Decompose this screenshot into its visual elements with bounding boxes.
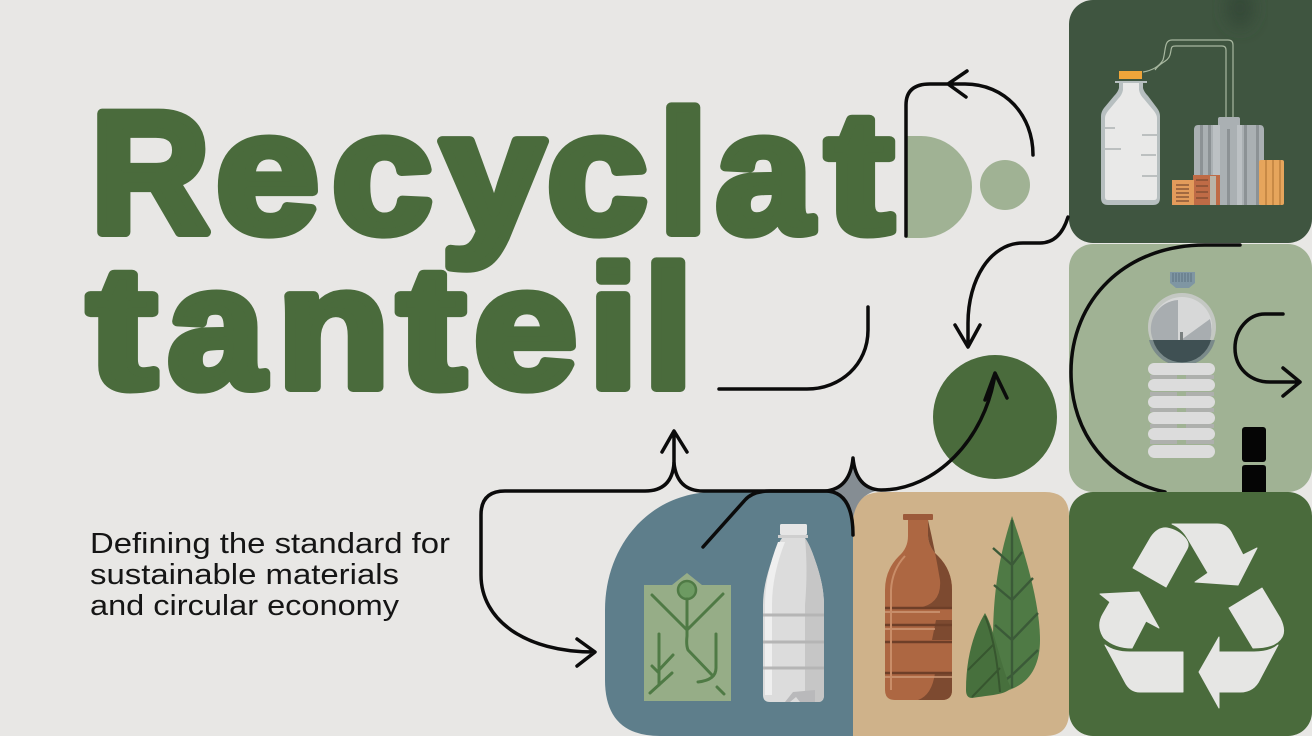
icon: small cartons xyxy=(1172,175,1220,205)
icon: brown bottle xyxy=(885,514,952,700)
title: y xyxy=(441,78,545,269)
pale small circle xyxy=(980,160,1030,210)
title: c xyxy=(332,77,432,269)
icon: ribbed bottle body xyxy=(1148,363,1215,458)
arrow: loop from top arrow to blue panel xyxy=(481,431,687,666)
open curve connector xyxy=(719,307,868,389)
arrow: branch into dark circle xyxy=(674,373,1007,491)
icon: connecting tube xyxy=(1143,40,1233,117)
panel: plant-based and PET blue xyxy=(605,492,853,736)
subtitle text block: and circular economy xyxy=(90,590,400,622)
subtitle text block: sustainable materials xyxy=(90,559,399,591)
icon: grey canister xyxy=(1194,117,1264,205)
subtitle text block xyxy=(90,528,450,622)
arrow: large arc xyxy=(1071,245,1240,492)
icon: leaves xyxy=(966,516,1040,698)
icon: plant diagram sign xyxy=(644,573,731,701)
icon: bottle cap xyxy=(1170,272,1195,288)
title: t xyxy=(398,232,465,424)
icon: gauge dial xyxy=(1148,293,1216,366)
title: n xyxy=(278,231,389,424)
panel: bio-based materials tan xyxy=(853,492,1069,736)
icon: recycling arrows xyxy=(1100,524,1284,708)
title: a xyxy=(716,76,813,269)
icon: orange crate xyxy=(1259,160,1284,205)
arrow: right-pointing loop xyxy=(1235,314,1300,396)
title: l xyxy=(659,76,708,269)
title: e xyxy=(474,231,577,424)
arrow: line from blue panel to junction xyxy=(703,491,853,547)
title: l xyxy=(644,231,693,424)
title: t xyxy=(826,77,893,269)
icon: white PET bottle xyxy=(763,524,824,702)
black blocks xyxy=(1242,427,1266,492)
pale half circle xyxy=(906,136,972,238)
title xyxy=(88,76,893,424)
icon: white jug with orange cap xyxy=(1101,71,1160,205)
arrow: top loop xyxy=(906,71,1033,236)
title: i xyxy=(589,231,638,424)
title: e xyxy=(216,76,319,269)
title: t xyxy=(88,232,156,424)
title: R xyxy=(91,77,210,269)
subtitle text block: Defining the standard for xyxy=(90,528,450,560)
title: c xyxy=(547,77,647,269)
panel: sorting bottle dial xyxy=(1069,244,1312,492)
panel: recycling symbol xyxy=(1069,492,1312,736)
grey four-point star xyxy=(826,458,880,520)
dark green circle xyxy=(933,355,1057,479)
title: a xyxy=(168,231,265,424)
panel: collection bottle and canister xyxy=(1069,0,1312,243)
arrow: from top panel down to circle xyxy=(955,217,1068,347)
